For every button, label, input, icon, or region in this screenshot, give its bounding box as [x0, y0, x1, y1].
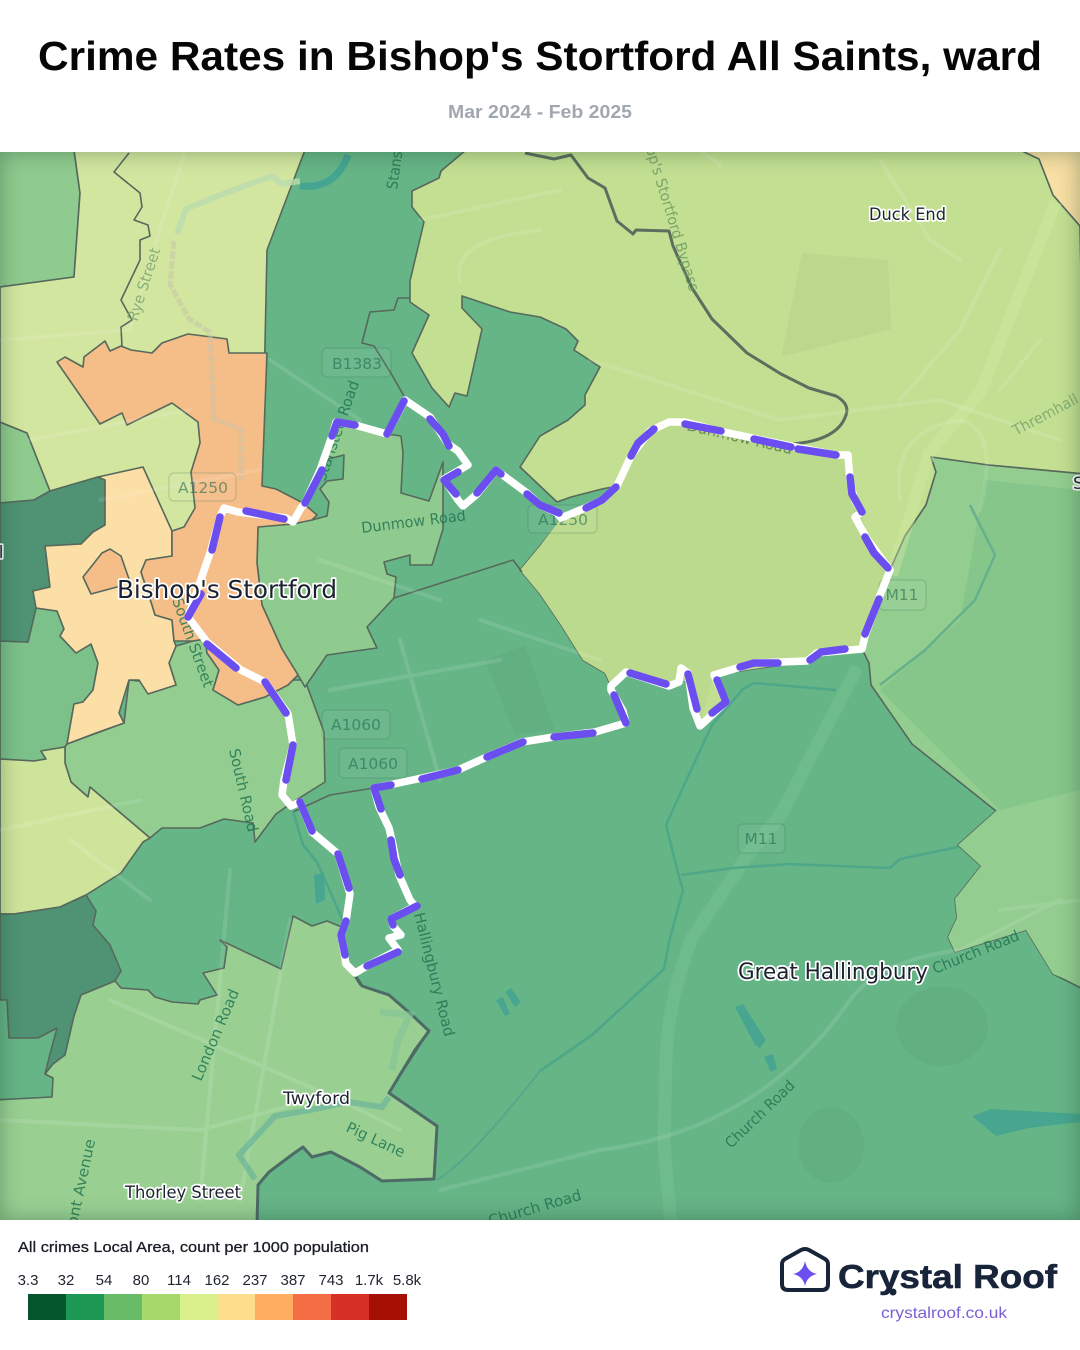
road label: Front Avenue: Front Avenue — [60, 1137, 99, 1241]
lake: south east — [972, 1109, 1080, 1136]
place: Duck End: Duck End — [869, 205, 946, 225]
legend scale labels: 5.8k — [393, 1272, 422, 1289]
ward: west mid green — [0, 608, 98, 761]
shield: A1250 east — [528, 505, 597, 533]
patch: park — [485, 645, 555, 735]
river: north pond — [300, 155, 348, 186]
shield: M11 south: M11 — [744, 830, 778, 848]
ward: top left light green — [0, 150, 80, 287]
legend scale labels: 80 — [133, 1272, 149, 1289]
ward boundary: Rye Street line — [114, 153, 150, 347]
local roads north east — [590, 150, 1060, 510]
legend scale labels: 32 — [58, 1272, 74, 1289]
ward: south central light green — [65, 639, 325, 842]
lake: small pond — [764, 1054, 777, 1072]
rivers and lakes — [170, 155, 1080, 1180]
shield: A1060 upper: A1060 — [331, 716, 381, 734]
road label: Rye Street: Rye Street — [124, 245, 164, 323]
road label: Church Road bottom: Church Road — [486, 1186, 583, 1230]
road label: South Road: South Road — [225, 747, 262, 834]
road label: South Street: South Street — [168, 595, 217, 690]
patch: woodland east — [896, 986, 988, 1066]
map edge vignette — [0, 152, 1080, 1220]
place labels — [0, 205, 1080, 1203]
ward boundary: north blob — [362, 298, 410, 398]
ward: south light green — [0, 916, 437, 1225]
ward: left light green — [0, 422, 50, 503]
patch: woodland — [798, 1107, 864, 1183]
shield: B1383 — [322, 348, 391, 377]
ward boundary route: All Saints — [188, 400, 890, 973]
river: east meadow — [880, 505, 995, 685]
legend scale labels: 387 — [280, 1272, 306, 1289]
ward area tint inside route — [520, 521, 770, 682]
lake: long pond — [735, 1004, 766, 1048]
road shields — [169, 348, 926, 853]
river: Twyford loop — [239, 1097, 389, 1179]
lake: channel pond — [314, 873, 325, 904]
river: east branch — [681, 847, 958, 875]
ward boundary: river Stort — [257, 975, 437, 1225]
shield: M11 south — [738, 824, 785, 853]
place: Bishop's Stortford: Bishop's Stortford — [117, 575, 337, 604]
patch: school field — [781, 253, 891, 357]
place: Great Hallingbury: Great Hallingbury — [738, 960, 928, 985]
road label: Stansted Road north: Stansted Road — [383, 89, 415, 191]
legend scale labels: 237 — [242, 1272, 268, 1289]
river: east main — [540, 683, 836, 1071]
road label: Church Road upper: Church Road — [930, 927, 1022, 978]
ward: south west yellow green — [0, 747, 150, 914]
route: white underlay — [188, 400, 890, 973]
shield: M11 east: M11 — [885, 586, 919, 604]
place: Twyford: Twyford — [282, 1089, 350, 1109]
river: south channel — [293, 811, 345, 925]
road label: Pig Lane: Pig Lane — [343, 1118, 408, 1161]
local roads south — [0, 800, 1080, 1200]
road label: Dunmow Road west: Dunmow Road — [360, 506, 467, 537]
road label: Hallingbury Road: Hallingbury Road — [410, 911, 458, 1038]
ward: dark green west — [0, 477, 105, 642]
road label: London Road: London Road — [188, 986, 243, 1084]
ward: north east yellow green — [410, 150, 1080, 726]
shield: A1060 lower: A1060 — [348, 755, 398, 773]
legend scale labels: 1.7k — [355, 1272, 384, 1289]
shield: A1250 east: A1250 — [538, 511, 588, 529]
ward: top left yellow green — [0, 150, 305, 560]
shield: A1250 west: A1250 — [178, 479, 228, 497]
shield: A1060 lower — [339, 748, 407, 778]
ward boundary: Bishop's Stortford Bypass — [525, 153, 847, 444]
lake: twin pond east — [505, 988, 521, 1007]
lake: twin pond west — [496, 997, 510, 1016]
ward: east meadow tint — [880, 480, 1080, 810]
road label: Dunmow Road east: Dunmow Road — [685, 416, 794, 458]
wordmark y tail — [890, 1288, 896, 1296]
legend colour swatches — [28, 1294, 407, 1320]
river: Stort north — [177, 176, 300, 234]
legend title: All crimes Local Area, count per 1000 population — [18, 1239, 369, 1256]
legend — [18, 1239, 422, 1320]
ward: orange isolated pocket — [83, 549, 129, 594]
logo: Crystal Roof — [782, 1249, 1058, 1322]
legend scale labels: 743 — [318, 1272, 344, 1289]
map base: mid green wards — [0, 152, 1080, 1220]
legend scale labels — [18, 1272, 422, 1289]
local roads town — [0, 152, 600, 780]
ward: east light green — [862, 457, 1080, 990]
legend scale labels: 114 — [167, 1272, 191, 1289]
shield: B1383: B1383 — [332, 355, 382, 373]
icon: house with star — [782, 1249, 828, 1290]
ward: east lower light green — [948, 790, 1080, 985]
legend scale labels: 162 — [204, 1272, 230, 1289]
subtitle: date range: Mar 2024 - Feb 2025 — [448, 102, 632, 122]
website url: crystalroof.co.uk — [881, 1305, 1008, 1322]
river: far south — [437, 1071, 540, 1180]
title: Crime Rates in Bishop's Stortford All Saints, ward — [38, 33, 1042, 79]
road label: Bishop's Stortford Bypass: Bishop's Stortford Bypass — [633, 116, 703, 293]
shield: M11 east — [879, 580, 926, 610]
road network — [0, 150, 1080, 1225]
river: Stort through town — [170, 241, 241, 480]
marsh: Twyford — [380, 1012, 410, 1070]
place: Thorley Street: Thorley Street — [124, 1183, 241, 1203]
route: purple dashes — [188, 401, 888, 966]
shield: A1250 west — [169, 473, 236, 501]
M11 north — [892, 202, 1056, 575]
road label: Church Road lower: Church Road — [721, 1076, 799, 1152]
legend scale labels: 3.3 — [18, 1272, 38, 1289]
ward: orange town centre — [57, 334, 317, 705]
ward boundary: central line — [394, 560, 522, 598]
shield: A1060 upper — [322, 710, 390, 739]
road label: Stansted Road south: Stansted Road — [312, 378, 363, 483]
ward: pale yellow town — [33, 467, 176, 744]
motorway M11 — [664, 672, 855, 1225]
wordmark: Crystal Roof — [838, 1258, 1058, 1295]
subtle land patches — [485, 253, 988, 1183]
legend scale labels: 54 — [96, 1272, 112, 1289]
ward boundary: A1060 line — [293, 788, 374, 812]
ward: Dunmow Road light green — [257, 422, 443, 687]
ward: corner pale yellow — [1022, 152, 1080, 226]
ward: dark green south west — [0, 895, 121, 1074]
